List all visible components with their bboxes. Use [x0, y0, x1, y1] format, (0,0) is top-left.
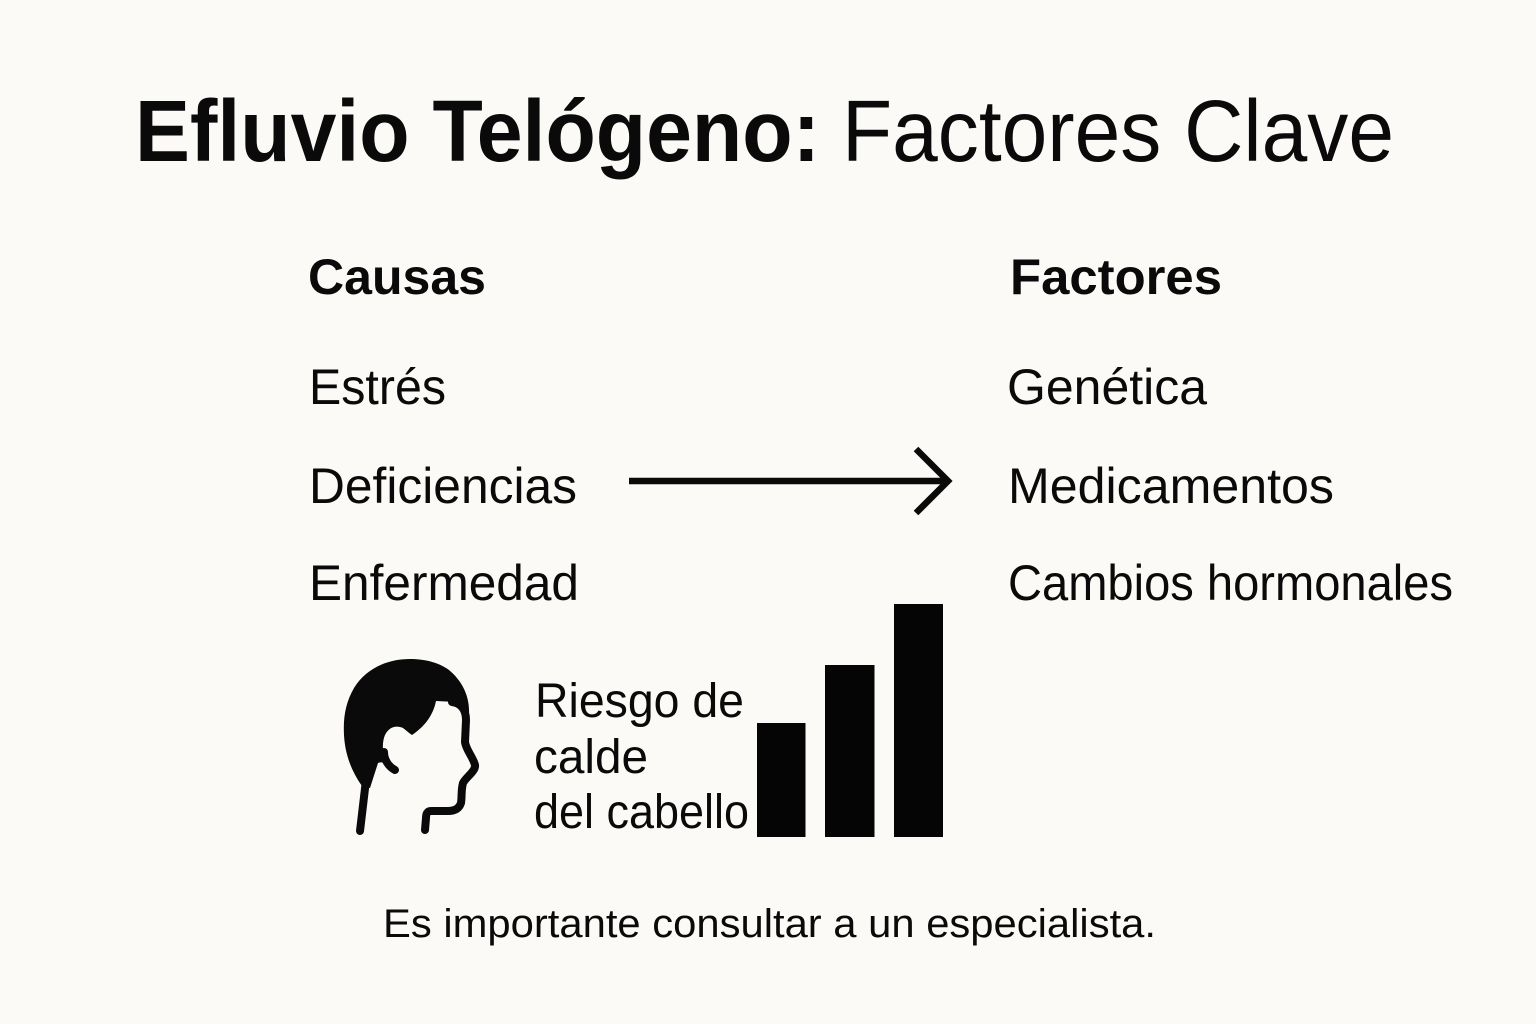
title: [135, 83, 1394, 180]
bar chart: [757, 604, 943, 837]
label: riesgo de caída del cabello: del cabello: [534, 786, 749, 839]
factor: cambios hormonales: Cambios hormonales: [1008, 555, 1453, 611]
title: Efluvio Telógeno:: [135, 83, 820, 180]
label: riesgo de caída del cabello: [534, 675, 749, 839]
label: riesgo de caída del cabello: Riesgo de: [535, 675, 744, 728]
icon: head profile: [344, 659, 475, 831]
cause: estrés: Estrés: [309, 359, 446, 415]
factor: genética: Genética: [1007, 359, 1207, 415]
heading: causas: Causas: [308, 249, 486, 305]
arrow: [629, 449, 948, 513]
footer note: Es importante consultar a un especialista.: [383, 902, 1156, 946]
factor: medicamentos: Medicamentos: [1008, 458, 1334, 514]
cause: enfermedad: Enfermedad: [309, 555, 579, 611]
cause: deficiencias: Deficiencias: [309, 458, 577, 514]
panel: factores: [1007, 249, 1453, 611]
panel: causas: [308, 249, 579, 611]
label: riesgo de caída del cabello: calde: [534, 731, 648, 784]
title: Factores Clave: [842, 83, 1394, 180]
heading: factores: Factores: [1010, 249, 1222, 305]
